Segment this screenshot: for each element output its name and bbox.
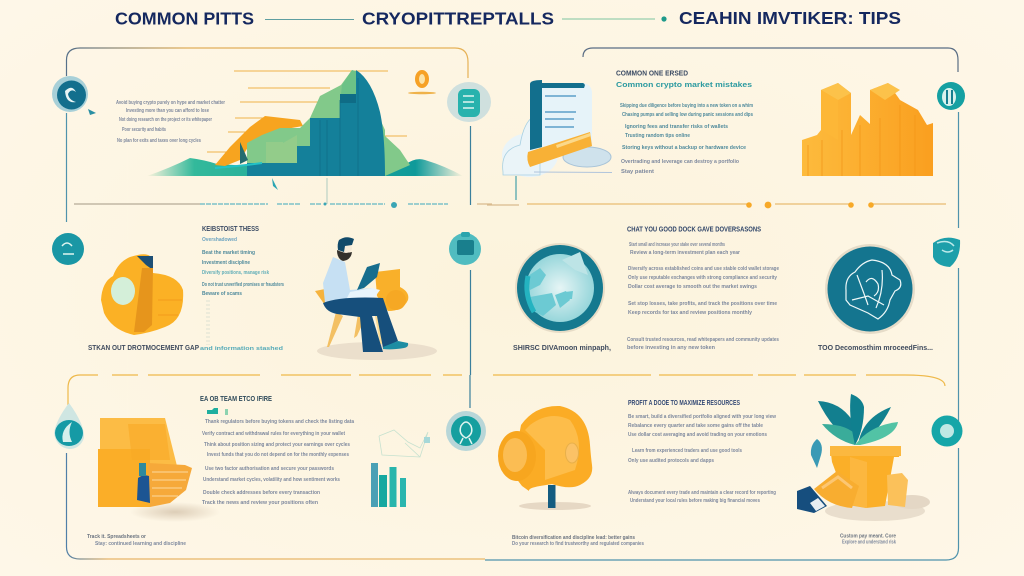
illustration: orange coin bbox=[498, 406, 592, 510]
text block: bottom centre: Rebalance every quarter and take some gains off the table bbox=[628, 423, 763, 429]
icon: bottom centre badge bbox=[446, 411, 486, 451]
illustration: orange jacket bbox=[101, 254, 183, 335]
text block: middle centre: Start small and increase your stake over several months bbox=[629, 242, 725, 248]
text block: middle left: Beware of scams bbox=[202, 291, 242, 297]
icon: bottom left water drop bbox=[54, 403, 84, 449]
illustration: orange folder bbox=[98, 418, 220, 522]
text block: top right: Overtrading and leverage can destroy a portfolio bbox=[621, 159, 740, 165]
text block: bottom left bbox=[200, 396, 355, 506]
caption: middle left: STKAN OUT DROTMOCEMENT GAP bbox=[88, 345, 199, 352]
footnote: bottom centre: Bitcoin diversification and discipline lead: better gains bbox=[512, 535, 635, 541]
text block: top right: COMMON ONE ERSED bbox=[616, 70, 688, 78]
text block: top right: Trusting random tips online bbox=[625, 133, 690, 139]
icon: right shield badge bbox=[933, 238, 960, 267]
text block: middle left: Diversify positions, manage risk bbox=[202, 270, 270, 276]
text block: middle left: Investment discipline bbox=[202, 260, 250, 266]
text block: bottom centre bbox=[628, 400, 777, 504]
icon: bottom right brain badge bbox=[932, 416, 962, 446]
text block: top right: Skipping due diligence before buying into a new token on a whim bbox=[620, 103, 753, 109]
text block: middle centre: Review a long-term investment plan each year bbox=[630, 250, 741, 256]
text block: top right: Chasing pumps and selling low during panic sessions and dips bbox=[622, 112, 753, 118]
icon: middle left recycle badge bbox=[52, 233, 84, 265]
divider dots bbox=[324, 202, 874, 208]
text block: middle centre: CHAT YOU GOOD DOCK GAVE DOVERSASONS bbox=[627, 226, 761, 234]
text block: bottom centre: Understand your local rules before making big financial moves bbox=[630, 498, 760, 504]
text block: top left: Investing more than you can afford to lose bbox=[126, 108, 209, 114]
text block: top left: Not doing research on the project or its whitepaper bbox=[119, 117, 213, 123]
panel: middle centre bbox=[513, 226, 779, 352]
panel: top right bbox=[502, 70, 933, 200]
text block: top left: Poor security and habits bbox=[122, 127, 166, 133]
footnote: bottom left: Stay: continued learning and discipline bbox=[95, 541, 186, 547]
text block: bottom left: Thank regulators before buying tokens and check the listing data bbox=[205, 419, 355, 425]
text block: middle centre: Only use reputable exchanges with strong compliance and security bbox=[628, 275, 778, 281]
text block: top left: No plan for exits and taxes over long cycles bbox=[117, 138, 201, 144]
header connector left bbox=[265, 18, 354, 20]
title: investor tips: CEAHIN IMVTIKER: TIPS bbox=[679, 8, 901, 28]
footnote: bottom left: Track it. Spreadsheets or bbox=[87, 534, 147, 540]
text block: top left bbox=[116, 100, 226, 144]
text block: bottom left: Use two factor authorisation and secure your passwords bbox=[205, 466, 334, 472]
illustration: globe bbox=[515, 243, 605, 333]
text block: bottom centre: Use dollar cost averaging and avoid trading on your emotions bbox=[628, 432, 767, 438]
panel frames bbox=[66, 48, 958, 560]
illustration: orange bars bbox=[802, 83, 933, 176]
title: common pitfalls: COMMON PITTS bbox=[115, 8, 254, 28]
text block: top right bbox=[616, 70, 753, 175]
footnote: bottom right bbox=[840, 534, 897, 546]
text block: middle centre: Set stop losses, take profits, and track the positions over time bbox=[628, 301, 777, 307]
text block: middle centre bbox=[627, 226, 779, 351]
text block: top right: Stay patient bbox=[621, 169, 654, 175]
footnote: bottom right: Explore and understand risk bbox=[842, 540, 897, 546]
text block: top right: Ignoring fees and transfer risks of wallets bbox=[625, 124, 728, 130]
text block: top right: Common crypto market mistakes bbox=[616, 80, 752, 89]
text block: bottom centre: Always document every trade and maintain a clear record for reporting bbox=[628, 490, 776, 496]
panel: middle left bbox=[88, 226, 437, 360]
icon: top centre backpack badge bbox=[447, 82, 491, 122]
text block: middle left: Beat the market timing bbox=[202, 250, 256, 256]
caption: globe: SHIRSC DIVAmoon minpaph, bbox=[513, 345, 611, 352]
text block: bottom centre: Be smart, build a diversified portfolio aligned with your long view bbox=[628, 414, 777, 420]
panel: bottom left bbox=[87, 396, 430, 547]
panel: bottom centre bbox=[498, 400, 777, 547]
header bbox=[115, 8, 901, 28]
text block: bottom left: Understand market cycles, volatility and how sentiment works bbox=[203, 477, 340, 483]
text block: bottom left: Think about position sizing and protect your earnings over cycles bbox=[204, 442, 350, 448]
illustration: man with laptop bbox=[315, 237, 437, 360]
caption: middle left: and information stashed bbox=[200, 346, 284, 352]
text block: middle left: KEIBSTOIST THESS bbox=[202, 226, 259, 233]
caption: emblem: TOO Decomosthim mroceedFins... bbox=[818, 345, 933, 352]
icon: top right at badge bbox=[937, 82, 965, 110]
text block: bottom left: EA OB TEAM ETCO IFIRE bbox=[200, 396, 272, 403]
text block: middle centre: before investing in any new token bbox=[627, 345, 716, 351]
chart: small bars and line bbox=[371, 430, 430, 507]
text block: bottom centre: Learn from experienced traders and use good tools bbox=[632, 448, 742, 454]
emblem: shield icon bbox=[825, 244, 915, 334]
panel: top left bbox=[116, 70, 463, 190]
icon: centre card badge bbox=[449, 232, 481, 265]
text block: bottom left: Track the news and review your positions often bbox=[202, 500, 319, 506]
text block: middle centre: Diversify across established coins and use stable cold wallet storage bbox=[628, 266, 779, 272]
footnote: bottom centre bbox=[512, 535, 644, 547]
chart: mountain bars bbox=[147, 70, 463, 190]
footnote: bottom left bbox=[87, 534, 186, 547]
illustration: plant in pot bbox=[797, 394, 930, 521]
text block: middle left bbox=[202, 226, 284, 297]
header connector right bbox=[562, 16, 667, 22]
text block: bottom centre: Only use audited protocols and dapps bbox=[628, 458, 714, 464]
text block: middle centre: Dollar cost average to smooth out the market swings bbox=[628, 284, 757, 290]
text block: middle left: Do not trust unverified promises or fraudsters bbox=[202, 282, 284, 288]
icon: warning badge bbox=[408, 70, 436, 94]
text block: middle centre: Keep records for tax and review positions monthly bbox=[628, 310, 753, 316]
illustration: document on cloud bbox=[502, 80, 612, 200]
text block: bottom left: Verify contract and withdrawal rules for everything in your wallet bbox=[202, 431, 345, 437]
title: crypto pitfalls: CRYOPITTREPTALLS bbox=[362, 8, 554, 28]
panel: middle right bbox=[818, 244, 933, 352]
panel: bottom right bbox=[797, 394, 930, 546]
text block: top left: Avoid buying crypto purely on hype and market chatter bbox=[116, 100, 226, 106]
icon: top left phone badge bbox=[52, 76, 96, 115]
text block: middle centre: Consult trusted resources, read whitepapers and community updates bbox=[627, 337, 779, 343]
footnote: bottom right: Custom pay meant. Core bbox=[840, 534, 896, 540]
text block: bottom left: Invest funds that you do not depend on for the monthly expenses bbox=[207, 452, 349, 458]
caption: middle left bbox=[88, 345, 284, 352]
text block: bottom left: Double check addresses before every transaction bbox=[203, 490, 321, 496]
text block: bottom centre: PROFIT A DOOE TO MAXIMIZE RESOURCES bbox=[628, 400, 740, 407]
text block: middle left: Overshadowed bbox=[202, 237, 238, 243]
footnote: bottom centre: Do your research to find trustworthy and regulated companies bbox=[512, 541, 644, 547]
text block: top right: Storing keys without a backup or hardware device bbox=[622, 145, 746, 151]
